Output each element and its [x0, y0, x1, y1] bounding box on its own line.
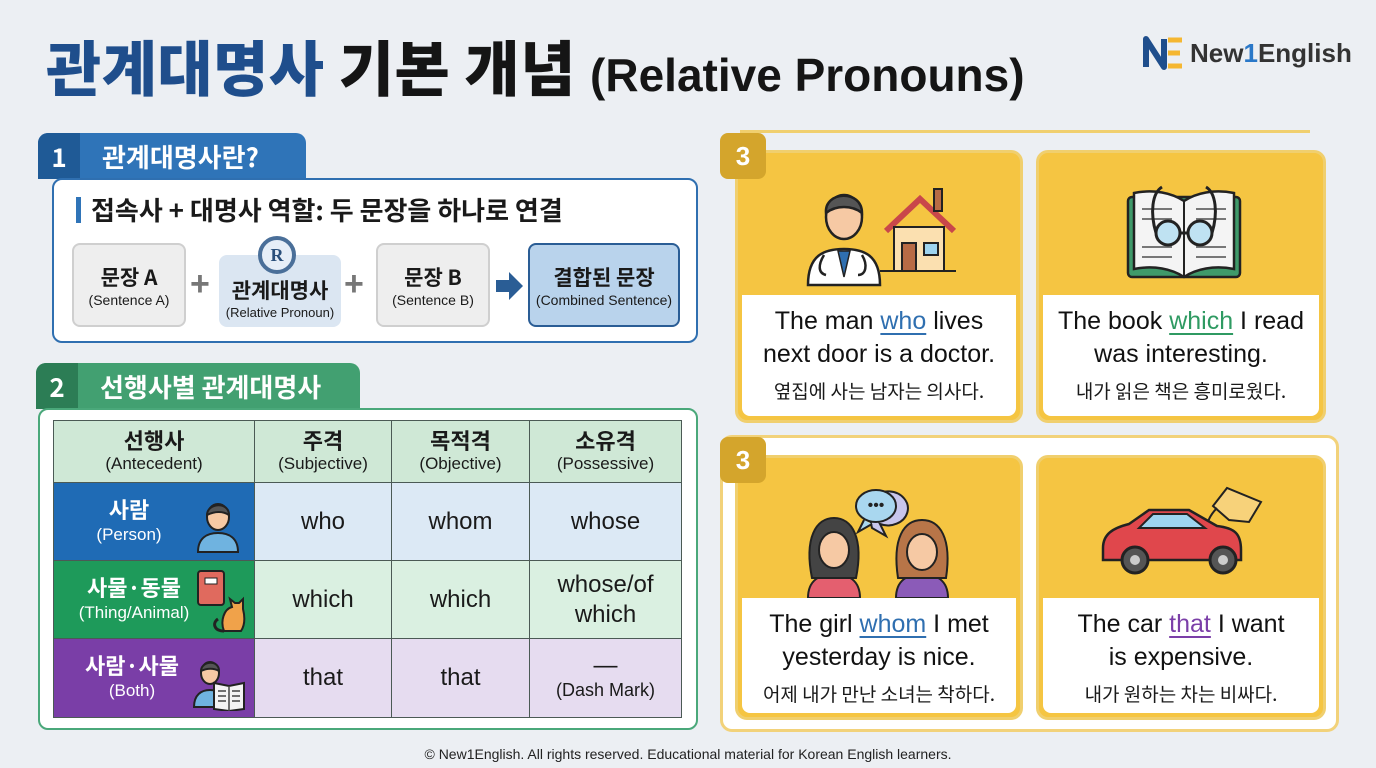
title: 관계대명사 기본 개념 (Relative Pronouns) [46, 22, 1025, 109]
table: whose [571, 508, 640, 534]
sentence box: 내가 원하는 차는 비싸다. [1085, 680, 1277, 707]
table: (Objective) [419, 454, 502, 472]
sentence A: 문장 A [101, 262, 157, 292]
sentence A: (Sentence A) [89, 292, 169, 308]
combined sentence: 결합된 문장 [553, 262, 655, 292]
sentence B: (Sentence B) [392, 292, 474, 308]
icon: R coin: R [270, 244, 284, 264]
table: 목적격 [430, 424, 491, 456]
table: that [440, 664, 481, 691]
tab 1: 1 [51, 138, 67, 174]
relative pronoun [219, 255, 341, 327]
sentence box: 내가 읽은 책은 흥미로웠다. [1076, 377, 1286, 404]
sentence box: was interesting. [1094, 340, 1268, 368]
sentence box [1043, 598, 1319, 713]
tab 2 [36, 363, 360, 409]
table: (Possessive) [557, 454, 654, 472]
panel 2: antecedent table [36, 363, 698, 730]
table: 주격 [303, 424, 343, 456]
sentence box: The man who lives [775, 307, 983, 335]
card: who [735, 150, 1023, 423]
sentence box [742, 598, 1016, 713]
sentence box: is expensive. [1109, 643, 1253, 671]
logo [1143, 36, 1352, 70]
tab 1 [38, 133, 306, 179]
table: (Both) [109, 681, 155, 700]
table: (Person) [96, 524, 162, 544]
table: (Thing/Animal) [79, 602, 189, 622]
table: 선행사 [124, 424, 184, 456]
table: (Subjective) [278, 454, 368, 472]
sentence box [742, 295, 1016, 416]
plus: + [190, 265, 210, 303]
sentence box: The book which I read [1058, 307, 1304, 335]
table: which [292, 586, 354, 612]
icon: two girls talking: ••• [868, 497, 884, 514]
table: which [430, 586, 491, 612]
footer: © New1English. All rights reserved. Educational material for Korean English learners. [424, 746, 952, 762]
sentence box: next door is a doctor. [763, 340, 995, 368]
table: that [303, 664, 343, 691]
sentence box: The girl whom I met [769, 610, 989, 638]
table: who [301, 508, 345, 534]
arrow [496, 272, 523, 300]
sentence box: 옆집에 사는 남자는 의사다. [774, 377, 984, 404]
relative pronoun: (Relative Pronoun) [226, 304, 334, 320]
icon: doctor and house [806, 188, 956, 286]
badge 3 (bottom): 3 [736, 444, 750, 474]
sentence box [1043, 295, 1319, 416]
bottom group outline [720, 435, 1339, 732]
card: whom [735, 455, 1023, 720]
table: 소유격 [575, 424, 636, 456]
icon: R coin [258, 236, 296, 274]
panel body [52, 178, 698, 343]
panel 1: what is relative pronoun [38, 133, 698, 343]
card: that [1036, 455, 1326, 720]
sentence box: yesterday is nice. [782, 643, 976, 671]
table: (Antecedent) [105, 454, 203, 472]
plus: + [344, 265, 364, 303]
table: whose/of [557, 570, 654, 598]
sentence box: The car that I want [1077, 610, 1285, 638]
icon: book with glasses [1126, 186, 1242, 278]
table [53, 420, 682, 718]
combined sentence: (Combined Sentence) [536, 292, 672, 308]
icon: two girls talking [807, 489, 949, 598]
tab 2: 2 [49, 368, 65, 404]
table: — [594, 652, 618, 679]
sentence A [72, 243, 186, 327]
combined sentence [528, 243, 680, 327]
sentence B: 문장 B [404, 262, 462, 292]
table: whom [428, 508, 493, 534]
panel body [38, 408, 698, 730]
table: which [575, 600, 636, 628]
badge 3 (top): 3 [736, 140, 750, 170]
icon: red car with tag [1102, 486, 1262, 574]
relative pronoun: 관계대명사 [232, 274, 328, 304]
tab 2: 선행사별 관계대명사 [100, 368, 321, 404]
card: which [1036, 150, 1326, 423]
sentence box: 어제 내가 만난 소녀는 착하다. [763, 680, 995, 707]
tab 1: 관계대명사란? [102, 138, 259, 174]
top line decoration [740, 130, 1310, 133]
badge 3 (bottom) [720, 437, 766, 483]
sentence B [376, 243, 490, 327]
table: (Dash Mark) [556, 680, 655, 700]
table: 사물·동물 [87, 570, 181, 602]
table: 사람 [109, 492, 149, 524]
table: 사람·사물 [85, 649, 179, 681]
logo: New1English [1190, 38, 1352, 68]
heading: 접속사 + 대명사 역할: 두 문장을 하나로 연결 [91, 191, 563, 228]
badge 3 (top) [720, 133, 766, 179]
